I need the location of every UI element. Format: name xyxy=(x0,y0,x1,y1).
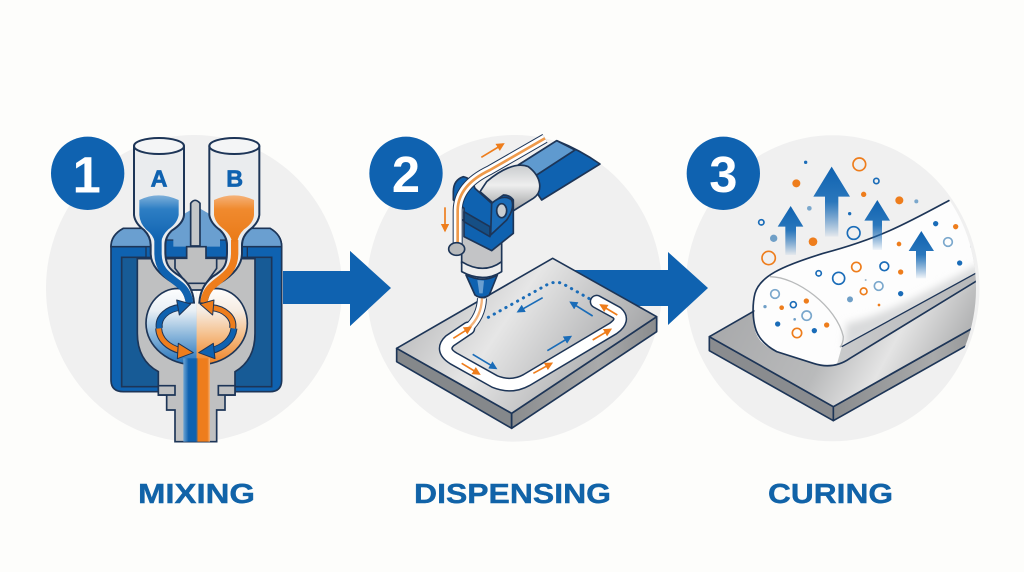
dotted path xyxy=(488,282,592,317)
step badge 1 xyxy=(51,137,124,210)
step badge 3 xyxy=(687,137,760,210)
bead outlines xyxy=(753,200,1000,366)
panel: curing xyxy=(687,137,1000,421)
dispensing illustration xyxy=(397,138,657,428)
arrow: mixing to dispensing xyxy=(283,251,391,326)
metal plate xyxy=(397,258,657,428)
panel backdrop circle xyxy=(367,135,662,442)
dispensing head xyxy=(453,177,513,297)
step badge 1: 1 xyxy=(73,147,101,204)
bead underside shading xyxy=(843,263,980,350)
dispensed bead xyxy=(446,298,620,385)
foam bead xyxy=(754,201,975,365)
arrow: mixing head xyxy=(350,251,391,326)
bead side band xyxy=(837,274,976,364)
step badge 3: 3 xyxy=(709,146,737,203)
label B: B xyxy=(226,166,243,192)
cured plate and bead xyxy=(709,200,1000,421)
panel: dispensing xyxy=(367,135,662,442)
hose clamp xyxy=(449,243,465,255)
step label: dispensing: DISPENSING xyxy=(414,478,611,509)
swirl arrows xyxy=(159,300,234,359)
robot arm xyxy=(480,141,600,215)
panel: mixing xyxy=(46,135,342,442)
panel backdrop circle xyxy=(46,135,342,442)
particles xyxy=(759,158,962,338)
step label: mixing: MIXING xyxy=(138,478,255,509)
cylinder A xyxy=(134,138,194,303)
rising arrows xyxy=(778,167,934,278)
label A: A xyxy=(151,166,168,192)
mixing chamber xyxy=(143,287,250,367)
output channel xyxy=(183,358,210,442)
step badge 2 xyxy=(369,137,443,210)
substrate plate xyxy=(709,247,1000,421)
step label: curing: CURING xyxy=(768,478,893,509)
panel: curing backdrop circle xyxy=(686,135,980,441)
step badge 2: 2 xyxy=(392,146,420,203)
supply hose xyxy=(458,138,545,245)
flow arrows xyxy=(445,144,617,374)
mixer housing xyxy=(111,200,282,442)
cylinder B xyxy=(199,138,259,303)
arrow: dispensing to curing xyxy=(570,252,708,325)
bead end face xyxy=(770,277,843,347)
